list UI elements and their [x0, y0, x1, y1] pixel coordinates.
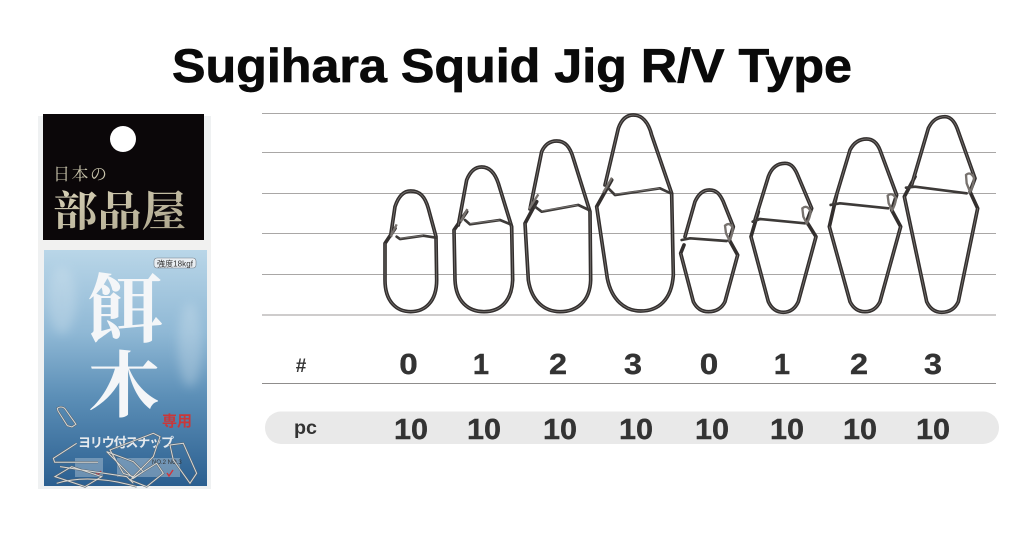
size values: 2 [850, 349, 868, 381]
product package photo [38, 114, 211, 489]
seal band [38, 240, 211, 250]
strength badge: 強度18kgf [157, 258, 194, 268]
large character: egi 2: 木 [88, 347, 160, 427]
size values: 2 [549, 349, 567, 381]
small snaps in package [53, 407, 197, 487]
quantity values: 10 [543, 414, 577, 446]
size values: 0 [700, 349, 718, 381]
size values [399, 349, 942, 381]
red label: 専用 [162, 412, 192, 430]
snap V size 2 [829, 139, 901, 312]
soft card highlights [48, 266, 202, 387]
snap V size 3 [904, 117, 978, 312]
snap V size 0 [681, 190, 738, 312]
quantity values: 10 [770, 414, 804, 446]
snap R size 3 [597, 115, 673, 311]
size table: NO.2 NO.3 [152, 460, 182, 466]
black header card [43, 114, 204, 240]
large character: egi 1: 餌 [87, 270, 163, 354]
quantity values: 10 [916, 414, 950, 446]
quantity values: 10 [394, 414, 428, 446]
quantity values: 10 [695, 414, 729, 446]
header text: Nihon no: 日本の [53, 165, 107, 184]
header text: Buhinya: 部品屋 [53, 189, 186, 236]
quantity values [394, 414, 950, 446]
product name on card: ヨリウ付スナップ [78, 435, 174, 450]
snap V size 1 [751, 163, 816, 312]
quantity values: 10 [619, 414, 653, 446]
quantity values: 10 [843, 414, 877, 446]
size row [296, 349, 942, 381]
chart ruler lines [262, 114, 996, 315]
hanging hole [110, 126, 136, 152]
quantity row [265, 412, 999, 446]
snap R size 1 [454, 167, 513, 312]
size values: 1 [774, 349, 790, 381]
snap R size 2 [525, 141, 591, 312]
title: Sugihara Squid Jig R/V Type [172, 39, 852, 92]
size values: 0 [399, 349, 418, 381]
pill background [265, 412, 999, 444]
blue card [44, 250, 207, 486]
size values: 3 [924, 349, 942, 381]
size table [75, 458, 182, 477]
clear plastic bag [38, 116, 211, 489]
size label: # [296, 356, 307, 377]
quantity values: 10 [467, 414, 501, 446]
R type snaps [385, 115, 673, 312]
size values: 1 [473, 349, 489, 381]
size values: 3 [624, 349, 642, 381]
snap R size 0 [385, 191, 437, 312]
V type snaps [681, 117, 978, 312]
quantity label: pc [294, 418, 317, 439]
